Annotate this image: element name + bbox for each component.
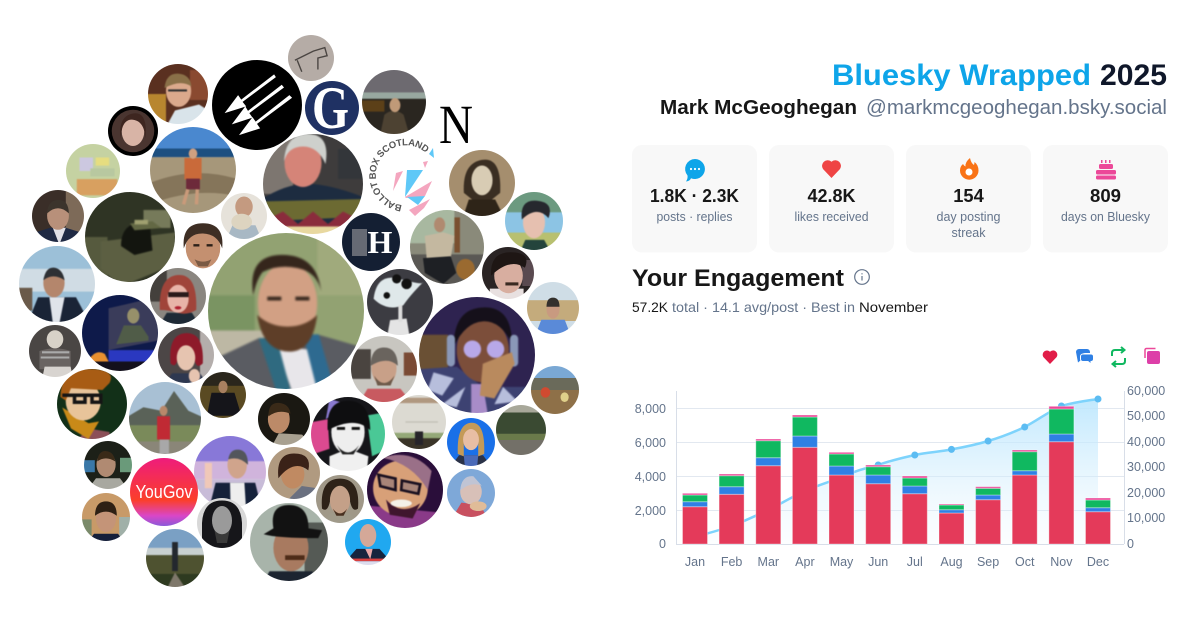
month labels: Jul xyxy=(907,555,923,569)
right axis labels: 0 xyxy=(1127,537,1134,551)
avatar: man with tree xyxy=(505,192,563,250)
avatar: child with drink xyxy=(445,467,497,519)
bar: Jan xyxy=(682,493,708,544)
right axis labels: 60,000 xyxy=(1127,384,1165,398)
left axis labels: 2,000 xyxy=(635,504,666,518)
avatar: main profile photo of Mark xyxy=(208,233,364,389)
avatar: woman with curly red hair xyxy=(158,327,214,383)
avatar: bull sketch xyxy=(288,35,334,81)
avatar: man on cliff xyxy=(150,127,236,213)
avatar: woman with red hair and sunglasses xyxy=(150,268,206,324)
avatar: man in bowler hat xyxy=(246,499,332,585)
month labels xyxy=(685,555,1109,569)
avatar: man in blue shirt xyxy=(527,282,579,334)
bar: Apr xyxy=(792,415,817,544)
avatar: lecture room xyxy=(392,395,446,449)
avatar: face cutout xyxy=(184,223,222,268)
avatar bubble cluster xyxy=(19,35,579,587)
avatar: YouGov logo: YouGov xyxy=(136,482,192,502)
avatar: headphones selfie xyxy=(419,297,535,413)
stat card: posts and replies: 1.8K · 2.3K xyxy=(650,186,739,206)
left axis labels xyxy=(635,402,666,551)
left axis labels: 0 xyxy=(659,537,666,551)
month labels: Nov xyxy=(1050,555,1073,569)
avatar: G logo: G xyxy=(312,75,349,141)
avatar: smiling man in suit xyxy=(19,246,95,322)
stat card: streak: streak xyxy=(952,226,986,240)
icon: reposts legend xyxy=(1112,347,1125,367)
avatar: man with glasses xyxy=(148,64,208,124)
right axis labels: 50,000 xyxy=(1127,409,1165,423)
month labels: May xyxy=(830,555,854,569)
stat card: likes: likes received xyxy=(794,210,869,224)
icon: speech bubble xyxy=(685,159,705,182)
grid lines xyxy=(676,391,1124,544)
profile name and handle: Mark McGeoghegan xyxy=(660,97,857,119)
month labels: Feb xyxy=(721,555,742,569)
avatar: man in dark suit seated xyxy=(200,372,246,418)
engagement summary xyxy=(632,299,928,315)
avatar: H logo: H xyxy=(368,224,393,260)
avatar: black circle with three arrows xyxy=(212,60,302,150)
title: Bluesky Wrapped xyxy=(832,59,1091,92)
bar: Oct xyxy=(1012,450,1037,544)
stat card: days on Bluesky: days on Bluesky xyxy=(1061,210,1151,224)
avatar: Snoopy xyxy=(367,269,433,335)
right axis labels xyxy=(1127,384,1165,551)
engagement summary: 57.2K xyxy=(632,299,669,315)
avatar: black and white child xyxy=(29,325,81,377)
avatar: blonde presenter xyxy=(447,418,495,466)
right axis labels: 30,000 xyxy=(1127,460,1165,474)
avatar: painted woman xyxy=(268,447,320,499)
icon: heart xyxy=(822,160,841,178)
engagement summary: total · 14.1 avg/post · Best in xyxy=(672,299,855,315)
avatar: Ballot Box Scotland logo: BALLOT BOX SCOTLAND xyxy=(369,138,428,212)
avatar: grey-haired man in pink shirt xyxy=(351,336,417,402)
left axis labels: 6,000 xyxy=(635,436,666,450)
avatar: map xyxy=(66,144,120,198)
avatar: man in TV studio xyxy=(84,441,132,489)
avatar: YouGov logo xyxy=(130,458,198,526)
stat card: streak xyxy=(906,145,1031,252)
icon: info xyxy=(855,270,869,284)
right axis labels: 20,000 xyxy=(1127,486,1165,500)
month labels: Jun xyxy=(868,555,888,569)
avatar: N logo: N xyxy=(439,94,473,155)
icon: flame xyxy=(960,158,978,180)
stat card: streak: day posting xyxy=(936,210,1001,224)
month labels: Mar xyxy=(758,555,779,569)
avatar: green cat scene xyxy=(85,192,175,282)
stat card: likes: 42.8K xyxy=(808,186,856,206)
stat card: posts and replies xyxy=(632,145,757,252)
right axis labels: 10,000 xyxy=(1127,511,1165,525)
avatar: H logo xyxy=(342,213,400,271)
month labels: Oct xyxy=(1015,555,1035,569)
bar: Dec xyxy=(1086,498,1110,544)
profile name and handle: @markmcgeoghegan.bsky.social xyxy=(866,97,1167,119)
stat card: likes xyxy=(769,145,894,252)
left axis labels: 8,000 xyxy=(635,402,666,416)
avatar: table with drinks xyxy=(531,366,579,414)
engagement summary: November xyxy=(859,299,928,315)
month labels: Apr xyxy=(795,555,815,569)
avatar: man with bookshelf xyxy=(80,491,132,543)
avatar: sweater man xyxy=(263,134,363,234)
avatar: hiker on hill xyxy=(143,526,207,590)
month labels: Sep xyxy=(977,555,999,569)
avatar: man with baby xyxy=(221,193,267,239)
bar: May xyxy=(829,452,854,544)
right axis labels: 40,000 xyxy=(1127,435,1165,449)
icon: likes legend xyxy=(1043,350,1057,364)
avatar: man at dusk xyxy=(362,70,426,134)
avatar: man in dark suit xyxy=(32,190,84,242)
avatar: man with moustache xyxy=(482,247,534,299)
bar: Mar xyxy=(756,439,781,544)
bar: Jun xyxy=(866,465,891,544)
stat card: streak: 154 xyxy=(953,186,984,206)
month labels: Jan xyxy=(685,555,705,569)
month labels: Aug xyxy=(940,555,963,569)
avatar: man in navy suit with purple sky xyxy=(194,436,266,506)
avatar: man with dog xyxy=(410,210,484,284)
avatar: man speaking xyxy=(258,393,310,445)
bar: Feb xyxy=(719,474,744,544)
avatar: black and white portrait on pink and green xyxy=(311,397,385,471)
engagement heading: Your Engagement xyxy=(632,265,844,292)
stacked bars xyxy=(682,406,1110,544)
avatar: forest and ruins xyxy=(496,405,546,455)
title: 2025 xyxy=(1100,59,1167,92)
bar: Nov xyxy=(1049,406,1074,544)
bar: Sep xyxy=(976,487,1001,544)
bar: Jul xyxy=(902,476,927,544)
stat card: posts and replies: posts · replies xyxy=(656,210,732,224)
avatar: sepia woman xyxy=(449,150,515,216)
left axis labels: 4,000 xyxy=(635,470,666,484)
avatar: woman with black border xyxy=(108,106,158,156)
legend icons xyxy=(1043,347,1160,367)
icon: cake xyxy=(1096,160,1116,180)
icon: replies legend xyxy=(1076,349,1094,364)
engagement combo chart xyxy=(635,384,1165,569)
profile name and handle xyxy=(660,97,1167,119)
avatar: black and white long hair man xyxy=(194,496,250,550)
cumulative area and line xyxy=(695,396,1102,544)
avatar: smiling man with glasses purple tint xyxy=(367,452,443,528)
avatar: man on stage screen xyxy=(82,295,158,371)
stat card: days on Bluesky xyxy=(1043,145,1168,252)
stat card: days on Bluesky: 809 xyxy=(1090,186,1121,206)
month labels: Dec xyxy=(1087,555,1109,569)
bar: Aug xyxy=(939,504,964,544)
avatar: Machu Picchu xyxy=(129,382,201,454)
avatar: long curly haired man xyxy=(314,473,366,525)
avatar: bald man on TV xyxy=(343,517,393,567)
avatar: cartoon man xyxy=(57,369,127,439)
icon: quotes legend xyxy=(1145,348,1160,364)
